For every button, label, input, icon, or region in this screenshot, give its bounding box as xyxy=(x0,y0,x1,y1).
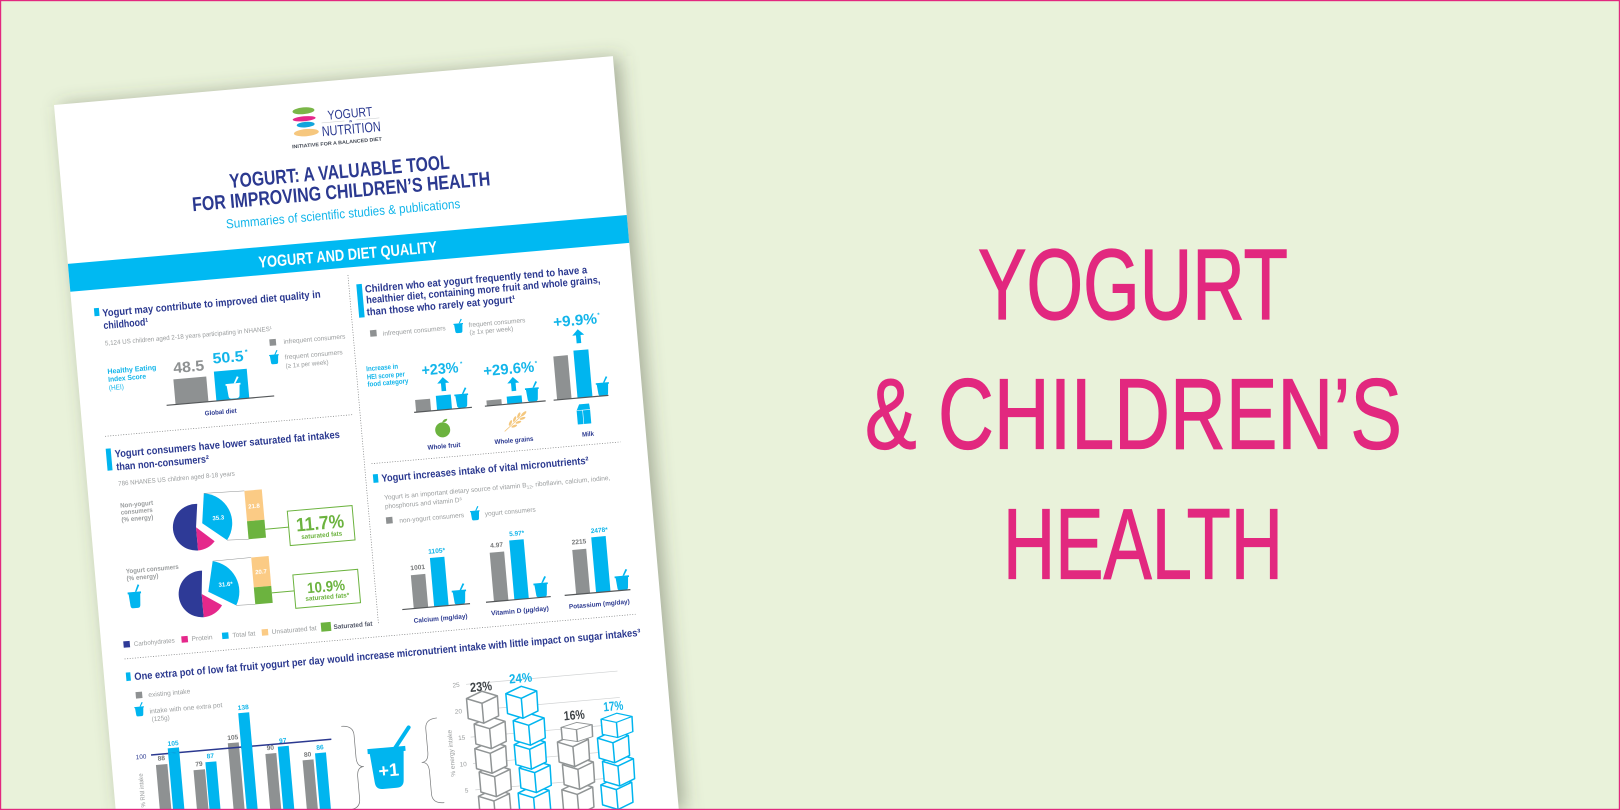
bar chart: calcium xyxy=(397,546,471,626)
stacked cubes: with extra pot 17%: 17% xyxy=(603,698,624,714)
brace: right xyxy=(418,718,444,804)
chart label: Increase in xyxy=(366,362,398,373)
panel: diet quality score xyxy=(94,287,352,426)
logo: NUTRITION xyxy=(321,118,381,139)
description xyxy=(384,475,612,511)
bar chart: potassium: Potassium (mg/day) xyxy=(569,599,630,611)
subtitle: Summaries of scientific studies & publications xyxy=(225,196,461,231)
sample description: 5,124 US children aged 2-18 years participating in NHANES¹ xyxy=(105,326,273,347)
bar chart: whole fruit xyxy=(410,358,472,412)
main title: HEALTH xyxy=(1003,488,1283,600)
bar chart: micronutrient intake: 105 xyxy=(227,734,239,742)
description: Yogurt is an important dietary source of vitamin B xyxy=(384,482,527,502)
logo: IN xyxy=(349,119,352,123)
legend: yogurt consumers xyxy=(485,507,537,518)
description: 12 xyxy=(527,484,533,490)
bar chart: potassium: 2215 xyxy=(571,538,587,547)
description: , riboflavin, calcium, iodine, xyxy=(531,475,611,489)
label: yogurt consumers xyxy=(125,564,182,609)
bar chart: whole grains: * xyxy=(535,361,538,367)
callout: 11.7% saturated fats xyxy=(264,506,355,548)
legend: energy sources: Carbohydrates xyxy=(134,637,176,648)
title: FOR IMPROVING CHILDREN’S HEALTH xyxy=(191,168,491,216)
legend: energy sources xyxy=(123,618,374,649)
legend: energy sources: Total fat xyxy=(232,630,256,639)
main title: & CHILDREN’S xyxy=(865,358,1402,470)
description: phosphorus and vitamin D³ xyxy=(385,497,463,511)
panel: extra pot of yogurt xyxy=(126,627,656,810)
legend: infrequent consumers xyxy=(283,333,346,346)
chart label: food category xyxy=(367,376,409,389)
icon: apple xyxy=(434,419,451,438)
panel: food categories xyxy=(356,263,614,457)
bar chart: micronutrient intake: 86 xyxy=(316,744,324,752)
heading: diet quality: childhood¹ xyxy=(103,316,149,332)
main title xyxy=(865,229,1402,600)
stacked cubes: with extra pot 24% xyxy=(504,669,554,810)
bar chart: milk xyxy=(546,310,610,400)
bar chart: micronutrient intake: 87 xyxy=(206,753,215,760)
bar chart: micronutrient intake xyxy=(132,697,337,810)
chart axis: energy intake: 20 xyxy=(455,708,463,716)
chart label: HEI score per xyxy=(367,369,405,382)
bar chart: vitamin D xyxy=(480,528,552,618)
bar chart: HEI score: Global diet xyxy=(205,408,238,418)
heading: diet quality xyxy=(94,289,322,333)
title: YOGURT: A VALUABLE TOOL xyxy=(228,152,450,193)
bar chart: whole grains: +29.6% xyxy=(483,359,535,380)
label: yogurt consumers: Yogurt consumers xyxy=(126,564,179,575)
chart axis: energy intake: 10 xyxy=(459,761,468,769)
title xyxy=(190,148,491,216)
label: whole grains: Whole grains xyxy=(494,436,534,446)
pie chart: yogurt consumers: 20.7 xyxy=(255,569,268,576)
icon: plus one yogurt pot: +1 xyxy=(378,759,400,781)
main title: YOGURT xyxy=(978,229,1288,341)
callout: 11.7% saturated fats: 11.7% xyxy=(295,511,345,536)
heading: diet quality: Yogurt may contribute to improved diet quality in xyxy=(102,289,321,320)
bar chart: micronutrient intake: % RNI intake xyxy=(138,773,148,808)
stacked cubes: existing 16%: 16% xyxy=(563,707,586,723)
heading: micronutrients: Yogurt increases intake of vital micronutrients² xyxy=(381,455,590,485)
poster xyxy=(54,56,679,810)
bar chart: milk: * xyxy=(597,313,601,319)
brace: left xyxy=(341,725,367,810)
pie chart: non-yogurt consumers: 21.8 xyxy=(248,504,261,511)
panel: saturated fat xyxy=(106,427,374,650)
legend: energy sources: Protein xyxy=(191,634,213,643)
stacked cubes: existing 23%: 23% xyxy=(469,678,493,695)
poster shadow xyxy=(60,57,685,810)
stacked cubes: with extra pot 24%: 24% xyxy=(509,670,533,686)
bar chart: micronutrient intake: 79 xyxy=(195,761,203,768)
legend: (≥ 1x per week) xyxy=(469,326,514,337)
heading: food categories xyxy=(356,263,602,319)
label: non-yogurt consumers: Non-yogurt xyxy=(120,500,154,510)
callout: 11.7% saturated fats: saturated fats xyxy=(301,531,343,541)
heading: saturated fat: Yogurt consumers have lower saturated fat intakes xyxy=(114,429,340,461)
legend: frequent consumers xyxy=(468,317,526,329)
heading: food categories: Children who eat yogurt frequently tend to have a xyxy=(364,264,588,296)
callout: 10.9% saturated fats: 10.9% xyxy=(306,577,346,597)
label: non-yogurt consumers: consumers xyxy=(121,507,153,517)
bar chart: calcium: 1001 xyxy=(410,564,426,572)
stacked cubes: existing 16% xyxy=(555,706,599,810)
icon: plus one yogurt pot xyxy=(366,727,414,790)
bar chart: HEI score: 48.5 xyxy=(173,357,205,377)
bar chart: vitamin D: 5.97* xyxy=(509,530,525,538)
bar chart: potassium: 2478* xyxy=(591,527,608,535)
bar chart: micronutrient intake: 105 xyxy=(167,740,179,748)
chart label xyxy=(366,361,409,389)
legend xyxy=(268,333,348,371)
bar chart: HEI score xyxy=(162,346,276,421)
bar chart: micronutrient intake: 80 xyxy=(304,751,312,759)
sample description: 786 NHANES US children aged 8-18 years xyxy=(118,471,236,488)
panel: micronutrients xyxy=(373,452,632,627)
legend: non-yogurt consumers xyxy=(399,512,465,525)
chart axis: energy intake: 25 xyxy=(452,682,460,689)
legend: frequent consumers xyxy=(285,349,344,361)
legend: infrequent consumers xyxy=(383,325,447,338)
icon: wheat xyxy=(503,410,529,431)
bar chart: micronutrient intake: 97 xyxy=(279,737,287,745)
logo: YOGURT xyxy=(327,104,373,123)
legend: (125g) xyxy=(151,715,170,723)
label: non-yogurt consumers: (% energy) xyxy=(121,514,154,524)
chart label xyxy=(107,363,158,392)
section band xyxy=(68,215,629,292)
bar chart: micronutrient intake: 90 xyxy=(266,745,275,752)
heading: food categories: than those who rarely eat yogurt¹ xyxy=(366,294,516,319)
stacked cubes: existing 23% xyxy=(465,677,514,810)
legend xyxy=(133,685,224,725)
legend: energy sources: Saturated fat xyxy=(333,621,374,631)
label: whole fruit: Whole fruit xyxy=(427,442,462,452)
legend: (≥ 1x per week) xyxy=(285,359,329,370)
bar chart: whole fruit: +23% xyxy=(421,359,459,379)
legend: existing intake xyxy=(148,688,191,699)
pie chart: non-yogurt consumers xyxy=(170,488,267,552)
heading: food categories: healthier diet, containing more fruit and whole grains, xyxy=(366,274,601,307)
bar chart: vitamin D: 4.97 xyxy=(490,542,504,550)
chart label: Index Score xyxy=(108,372,146,384)
label: yogurt consumers: (% energy) xyxy=(126,573,159,583)
legend xyxy=(370,313,527,345)
legend xyxy=(386,501,537,528)
bar chart: calcium: Calcium (mg/day) xyxy=(413,613,468,625)
label: non-yogurt consumers xyxy=(120,500,155,524)
bar chart: whole fruit: * xyxy=(460,361,463,368)
callout: 10.9% saturated fats: saturated fats* xyxy=(305,592,350,603)
stacked cubes: with extra pot 17% xyxy=(593,697,640,810)
chart label: (HEI) xyxy=(108,382,124,392)
legend: intake with one extra pot xyxy=(149,702,223,715)
chart axis: energy intake xyxy=(442,668,627,796)
pie chart: yogurt consumers xyxy=(176,556,273,619)
chart axis: energy intake: 5 xyxy=(465,787,469,795)
logo xyxy=(289,101,382,150)
label: milk: Milk xyxy=(582,431,595,439)
heading: saturated fat: than non-consumers² xyxy=(116,453,210,473)
bar chart: HEI score: * xyxy=(245,349,248,356)
heading: extra pot: One extra pot of low fat fruit yogurt per day would increase micronutrient intake with little impact on sugar intakes³ xyxy=(134,627,641,683)
chart axis: energy intake: 15 xyxy=(458,735,466,742)
bar chart: micronutrient intake: 88 xyxy=(157,755,166,763)
chart label: Healthy Eating xyxy=(107,363,157,376)
callout: 10.9% saturated fats xyxy=(270,569,361,610)
logo: INITIATIVE FOR A BALANCED DIET xyxy=(292,137,382,150)
pie chart: yogurt consumers: 31.6* xyxy=(218,582,234,589)
bar chart: potassium xyxy=(559,525,632,611)
bar chart: milk: +9.9% xyxy=(552,311,598,331)
heading: saturated fat xyxy=(106,428,342,474)
section band: YOGURT AND DIET QUALITY xyxy=(258,239,438,272)
chart axis: energy intake: % energy intake xyxy=(446,729,458,777)
bar chart: calcium: 1105* xyxy=(428,547,446,556)
bar chart: whole grains xyxy=(481,358,546,406)
bar chart: vitamin D: Vitamin D (µg/day) xyxy=(491,605,549,617)
legend: energy sources: Unsaturated fat xyxy=(272,625,317,636)
pie chart: non-yogurt consumers: 35.3 xyxy=(212,515,225,522)
bar chart: micronutrient intake: 100 xyxy=(135,753,147,761)
bar chart: micronutrient intake: 138 xyxy=(237,704,249,712)
bar chart: HEI score: 50.5 xyxy=(212,348,244,368)
icon: milk carton xyxy=(576,403,591,425)
